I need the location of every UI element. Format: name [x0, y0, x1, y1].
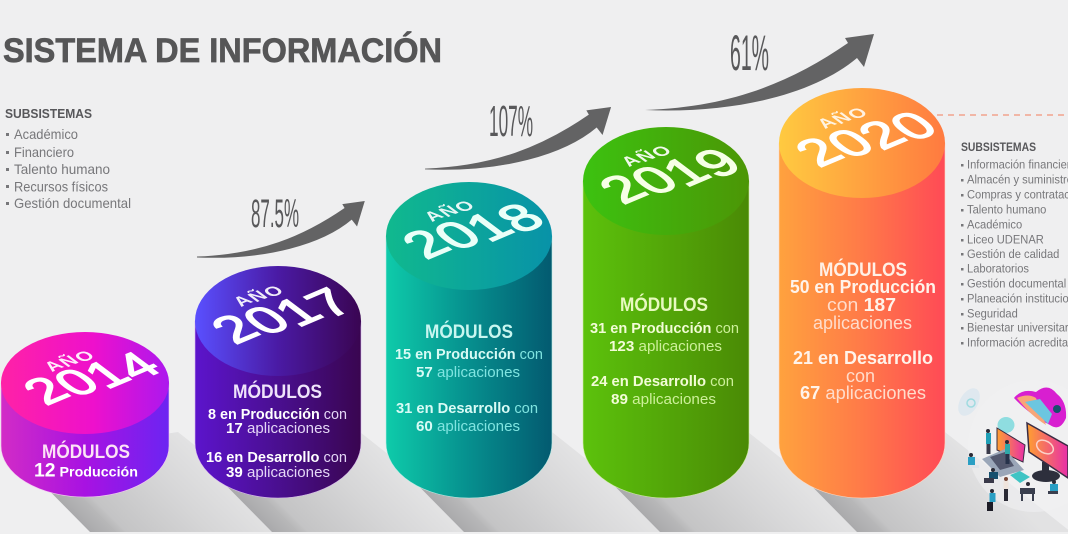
year label 2017: AÑO: [228, 279, 289, 312]
year label 2014: 2014: [10, 334, 172, 421]
modules text 2020: con 187: [827, 295, 896, 315]
modules text 2020: 50 en Producción: [790, 277, 936, 297]
modules text 2018: 57 aplicaciones: [416, 364, 520, 381]
year label 2014: AÑO: [39, 344, 100, 377]
title: SISTEMA DE INFORMACIÓN: [3, 32, 442, 70]
year label 2017: 2017: [199, 272, 366, 361]
icon: platform: [982, 449, 1024, 477]
right subsystems list: Laboratorios: [967, 263, 1029, 276]
right subsystems list: Seguridad: [967, 308, 1018, 321]
cylinder 2014: [1, 332, 172, 497]
modules text 2019: [590, 294, 739, 408]
modules text 2017: 17 aplicaciones: [226, 420, 330, 437]
icon: left monitor: [997, 428, 1025, 462]
right subsystems list: Talento humano: [967, 204, 1046, 217]
right subsystems list: Gestión de calidad: [967, 249, 1059, 261]
year label 2018: AÑO: [419, 194, 480, 227]
left subsystems list: [5, 106, 131, 211]
year label 2018: 2018: [390, 187, 557, 276]
right subsystems list: [961, 140, 1068, 350]
cylinder 2019: [583, 127, 754, 498]
icon: database: [998, 417, 1014, 433]
right subsystems list: Académico: [967, 219, 1022, 232]
modules text 2020: [790, 259, 936, 403]
left subsystems list: Financiero: [14, 144, 74, 160]
illustration: team working with cloud systems: [954, 380, 1068, 512]
year label 2019: 2019: [587, 132, 754, 221]
icon: people: [968, 429, 1058, 511]
infographic canvas: 107%: [489, 97, 533, 146]
modules text 2017: MÓDULOS: [233, 381, 322, 403]
modules text 2019: 31 en Producción con: [590, 320, 739, 337]
modules text 2020: 67 aplicaciones: [800, 383, 926, 403]
modules text 2017: 16 en Desarrollo con: [206, 449, 347, 466]
modules text 2019: 123 aplicaciones: [609, 338, 722, 355]
icon: right monitor: [1027, 423, 1068, 482]
dashed connector: [937, 114, 1068, 116]
left subsystems list: Gestión documental: [14, 195, 131, 211]
modules text 2014: [34, 441, 138, 482]
modules text 2019: 89 aplicaciones: [611, 391, 716, 408]
modules text 2020: con: [846, 366, 875, 386]
year label 2019: AÑO: [616, 139, 677, 172]
cylinder 2020: [779, 88, 950, 498]
cast shadows: [16, 432, 1068, 532]
cylinder 2018: [386, 182, 557, 498]
cylinder 2017: [195, 266, 366, 498]
modules text 2017: [206, 381, 347, 481]
modules text 2019: 24 en Desarrollo con: [591, 373, 734, 390]
arrow 2017: [197, 202, 364, 257]
modules text 2018: MÓDULOS: [425, 321, 513, 343]
icon: data cloud: [1014, 387, 1066, 427]
left subsystems list: Académico: [14, 126, 78, 142]
modules text 2018: 15 en Producción con: [395, 346, 543, 363]
year label 2020: 2020: [783, 95, 950, 184]
modules text 2018: 60 aplicaciones: [416, 418, 520, 435]
modules text 2020: 21 en Desarrollo: [793, 348, 933, 368]
left subsystems list: SUBSISTEMAS: [5, 106, 92, 121]
modules text 2017: 39 aplicaciones: [226, 464, 330, 481]
infographic canvas: 61%: [730, 25, 769, 81]
left subsystems list: Recursos físicos: [14, 178, 108, 194]
left subsystems list: Talento humano: [14, 161, 110, 177]
modules text 2017: 8 en Producción con: [208, 406, 347, 423]
modules text 2020: MÓDULOS: [819, 259, 907, 281]
modules text 2018: 31 en Desarrollo con: [396, 400, 538, 417]
modules text 2019: MÓDULOS: [620, 294, 708, 316]
modules text 2014: MÓDULOS: [42, 441, 130, 463]
modules text 2020: aplicaciones: [813, 313, 912, 333]
modules text 2014: 12 Producción: [34, 460, 138, 482]
infographic canvas: 87.5%: [251, 192, 299, 236]
arrow 2018: [425, 107, 610, 169]
year label 2020: AÑO: [812, 101, 873, 134]
right subsystems list: Gestión documental: [967, 278, 1066, 291]
right subsystems list: SUBSISTEMAS: [961, 140, 1036, 154]
modules text 2018: [395, 321, 543, 435]
icon: pale cloud: [954, 385, 984, 419]
icon: tablet: [1010, 471, 1030, 483]
right subsystems list: Liceo UDENAR: [967, 234, 1044, 247]
arrow 2019: [645, 34, 874, 110]
